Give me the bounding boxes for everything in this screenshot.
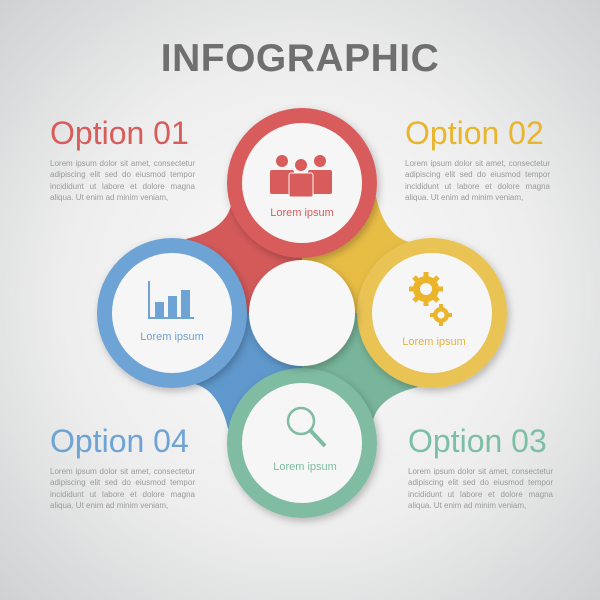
text block: option 04 [50, 423, 195, 510]
text block: option 02: Lorem ipsum dolor sit amet, consectetur adipiscing elit sed do eiusmod tempor incididunt ut labore et dolore magna aliqua. Ut enim ad minim veniam, [405, 159, 550, 202]
circle: red [227, 108, 377, 258]
icon: bar chart [148, 281, 194, 319]
text block: option 03 [408, 423, 553, 510]
text block: option 01 [50, 115, 195, 202]
circle: blue [97, 238, 247, 388]
text block: option 02 [405, 115, 550, 202]
band: NW red [172, 183, 302, 313]
text block: option 03: Option 03 [408, 423, 547, 459]
icon: magnifier [288, 408, 325, 446]
text block: option 04: Option 04 [50, 423, 189, 459]
circle: green: Lorem ipsum [273, 461, 337, 473]
text block: option 01: Lorem ipsum dolor sit amet, consectetur adipiscing elit sed do eiusmod tempor incididunt ut labore et dolore magna aliqua. Ut enim ad minim veniam, [50, 159, 195, 202]
circle: red: Lorem ipsum [270, 207, 334, 219]
text block: option 04: Lorem ipsum dolor sit amet, consectetur adipiscing elit sed do eiusmod tempor incididunt ut labore et dolore magna aliqua. Ut enim ad minim veniam, [50, 467, 195, 510]
band: SE green [302, 313, 432, 443]
text block: option 02: Option 02 [405, 115, 544, 151]
text block: option 01: Option 01 [50, 115, 189, 151]
text block: option 03: Lorem ipsum dolor sit amet, consectetur adipiscing elit sed do eiusmod tempor incididunt ut labore et dolore magna aliqua. Ut enim ad minim veniam, [408, 467, 553, 510]
circle: blue: Lorem ipsum [140, 331, 204, 343]
icon: team [270, 155, 332, 197]
icon: gears [413, 276, 449, 323]
title: INFOGRAPHIC [161, 37, 439, 80]
circle: yellow: Lorem ipsum [402, 336, 466, 348]
band: NE yellow [302, 183, 432, 313]
circle: yellow [357, 238, 507, 388]
band: SW blue [172, 313, 302, 443]
circle: green [227, 368, 377, 518]
center circle [249, 260, 355, 366]
